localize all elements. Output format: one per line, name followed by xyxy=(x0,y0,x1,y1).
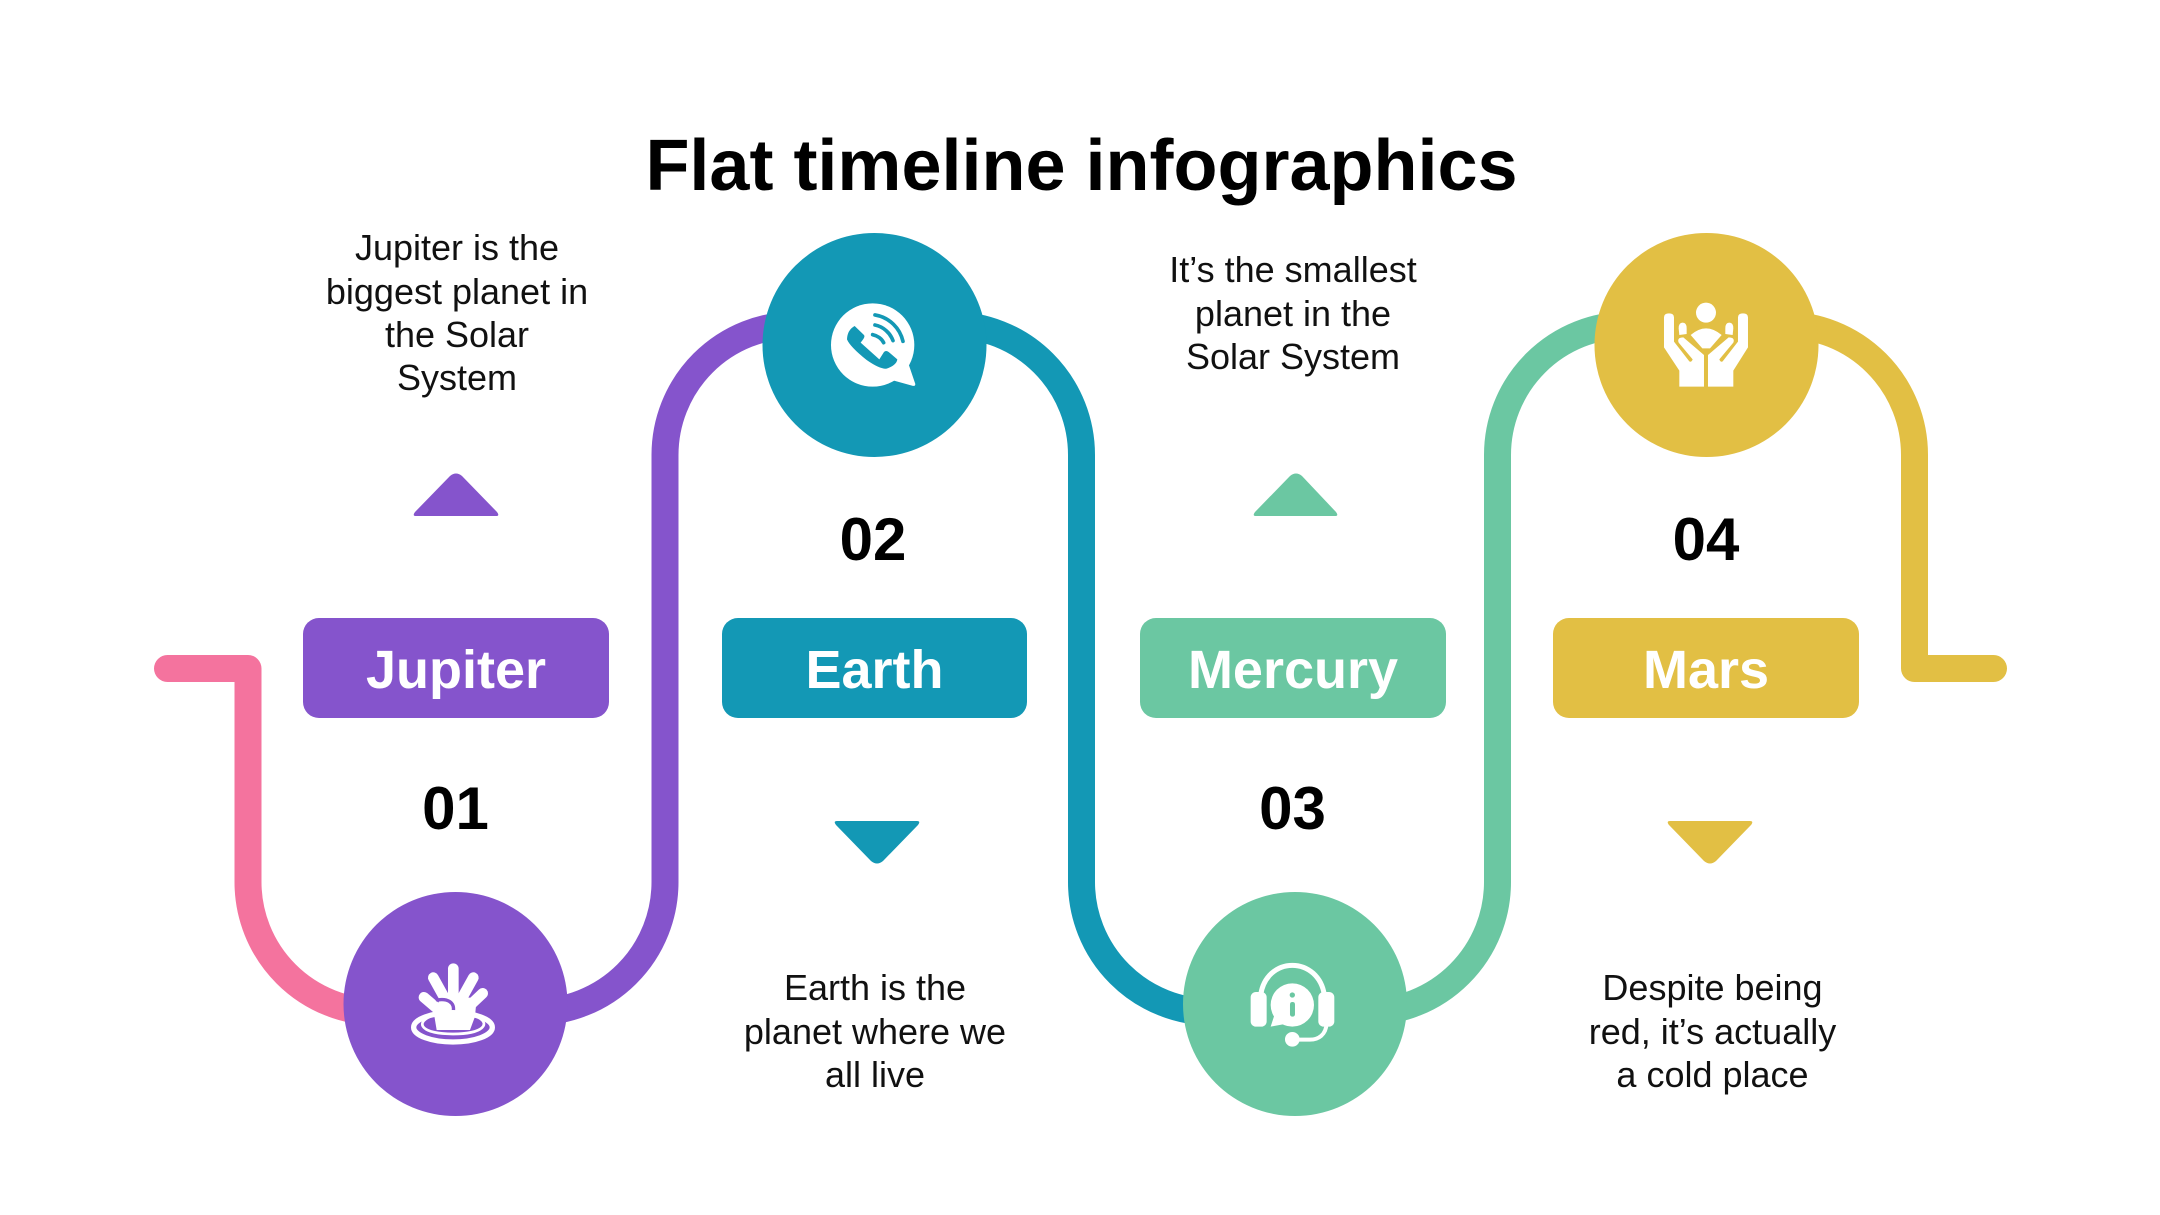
title: Flat timeline infographics xyxy=(645,126,1518,206)
step 2: Earth xyxy=(722,233,1027,1095)
label: Jupiter xyxy=(303,618,609,718)
step 4: Mars xyxy=(1553,233,1859,1095)
timeline path: teal segment xyxy=(900,325,1260,1012)
label: Earth: Earth xyxy=(805,640,944,700)
number 04: 04 xyxy=(1673,506,1740,573)
timeline path: yellow segment xyxy=(1740,325,1994,668)
label: Jupiter: Jupiter xyxy=(366,640,546,700)
number 03: 03 xyxy=(1259,775,1326,842)
description: Jupiter: Jupiter is the xyxy=(355,227,559,268)
description: Mercury: Solar System xyxy=(1186,336,1400,377)
step 3: Mercury xyxy=(1140,249,1446,1116)
node circle 3 with icon: headset info xyxy=(1183,892,1407,1116)
timeline path: purple segment xyxy=(480,325,850,1012)
description: Mars: Despite being xyxy=(1602,967,1823,1008)
label: Mercury: Mercury xyxy=(1188,640,1398,700)
label: Earth xyxy=(722,618,1027,718)
description: Jupiter: System xyxy=(397,357,517,398)
node circle 4 with icon: hands holding person xyxy=(1594,233,1818,457)
description: Earth: planet where we xyxy=(744,1011,1006,1052)
node circle 1 with icon: hand splash xyxy=(344,892,568,1116)
step 1: Jupiter xyxy=(303,227,609,1116)
description: Jupiter: biggest planet in xyxy=(326,271,588,312)
label: Mars: Mars xyxy=(1643,640,1769,700)
arrow: up xyxy=(414,474,498,516)
timeline path: green segment xyxy=(1330,325,1680,1012)
description: Earth: Earth is the xyxy=(784,967,966,1008)
arrow: down xyxy=(835,821,919,864)
description: Mars: red, it’s actually xyxy=(1589,1011,1836,1052)
arrow: down xyxy=(1668,821,1752,864)
description: Earth: all live xyxy=(825,1054,925,1095)
arrow: up xyxy=(1254,474,1337,516)
description: Mercury: It’s the smallest xyxy=(1169,249,1417,290)
label: Mars xyxy=(1553,618,1859,718)
description: Jupiter: the Solar xyxy=(385,314,529,355)
timeline path: pink lead-in xyxy=(168,668,420,1012)
number 02: 02 xyxy=(840,506,906,573)
number 01: 01 xyxy=(422,775,489,842)
node circle 2 with icon: phone bubble xyxy=(762,233,986,457)
description: Mars: a cold place xyxy=(1616,1054,1809,1095)
label: Mercury xyxy=(1140,618,1446,718)
description: Mercury: planet in the xyxy=(1195,293,1391,334)
